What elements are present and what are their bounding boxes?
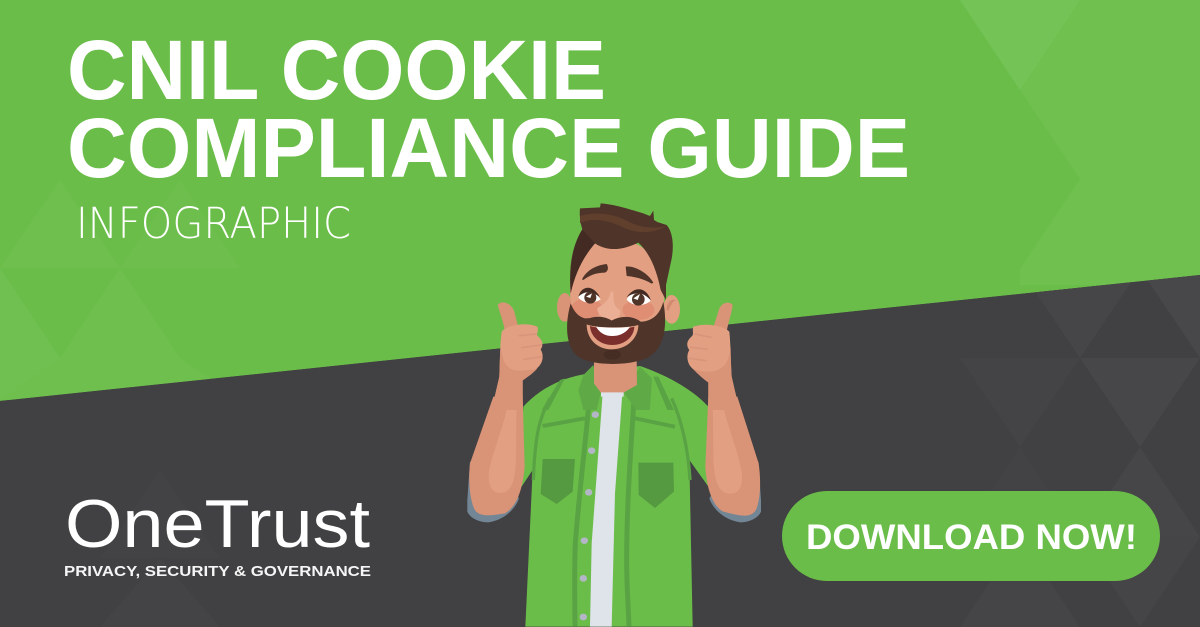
shirt details [533,398,550,480]
title: CNIL COOKIE [67,23,606,117]
hair [570,203,673,300]
panel: green background [0,0,1200,401]
logo: OneTrust: PRIVACY, SECURITY & GOVERNANCE [64,563,371,580]
button: download now [782,491,1160,581]
face [570,240,664,350]
right forearm [705,397,760,516]
right pocket [638,463,674,508]
logo: OneTrust: OneTrust [65,486,370,562]
left pocket [541,459,575,504]
left hand [492,302,543,410]
mustache [585,317,641,325]
shirt [503,366,729,627]
cheeks [571,298,602,318]
subtitle: INFOGRAPHIC [76,199,351,249]
panel: dark background [0,275,1200,401]
right cuff [709,462,761,522]
collar and neck shading [578,365,601,410]
left forearm [469,397,525,515]
undershirt [590,393,622,627]
eyebrows [582,264,608,280]
eyes [578,288,651,306]
title [67,23,910,195]
undershirt collar [601,392,624,397]
left cuff [467,462,519,522]
chin patch [604,350,621,360]
right hand [687,303,739,410]
illustration: man with thumbs up [467,203,761,627]
buttons [580,411,599,620]
ears [557,293,572,322]
mouth [587,324,638,349]
neck [594,358,637,392]
beard [567,302,665,364]
button: download now: DOWNLOAD NOW! [806,518,1137,557]
title: COMPLIANCE GUIDE [67,101,910,195]
hair highlight [580,214,666,232]
nose [597,292,620,320]
